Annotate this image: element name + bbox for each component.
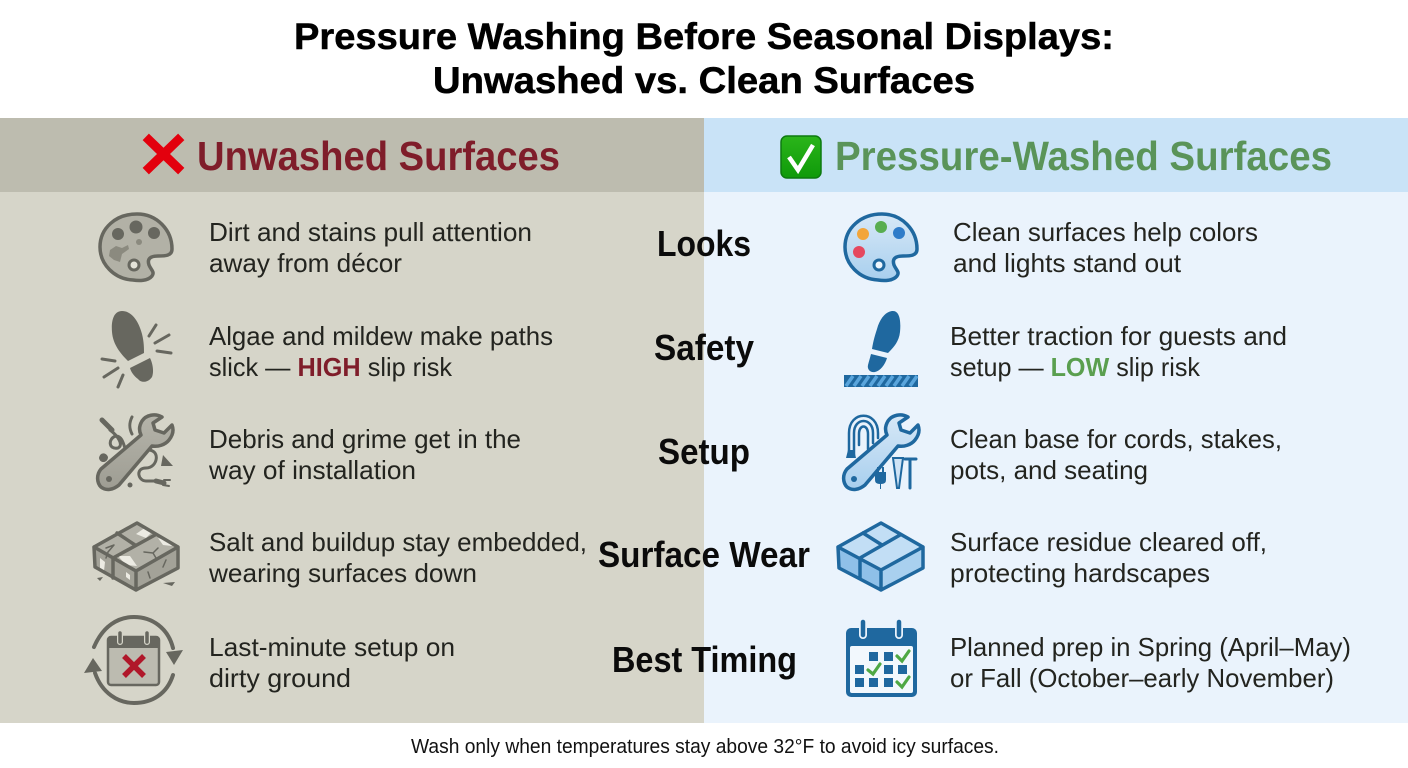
icon: cracked paver — [94, 523, 178, 590]
footer note: Wash only when temperatures stay above 32°F to avoid icy surfaces. — [411, 736, 999, 758]
icon: clean paver — [838, 523, 923, 590]
category labels: Safety — [654, 327, 754, 368]
text: looks, unwashed: away from décor — [209, 248, 402, 278]
panel: pressure-washed surfaces — [704, 118, 1408, 723]
category labels: Looks — [657, 223, 751, 264]
icon: calendar with green checks — [846, 622, 917, 697]
text: best timing, washed — [950, 632, 1351, 693]
text: safety, washed — [950, 321, 1287, 382]
text: surface wear, washed: protecting hardscapes — [950, 558, 1210, 588]
text: safety, unwashed: slick — HIGH slip risk — [209, 352, 453, 382]
text: surface wear, washed — [950, 527, 1267, 588]
icon: dirty palette — [100, 214, 172, 281]
text: setup, unwashed — [208, 424, 521, 485]
category labels — [598, 223, 810, 680]
text: looks, unwashed: Dirt and stains pull attention — [209, 217, 532, 247]
icon: calendar with red x and cycle arrows — [84, 617, 183, 703]
text: looks, washed — [953, 217, 1258, 278]
category labels: Best Timing — [612, 639, 797, 680]
icon: slipping shoe print — [102, 311, 171, 387]
text: safety, washed: Better traction for guests and — [950, 321, 1287, 351]
text: best timing, unwashed: Last-minute setup on — [209, 632, 455, 662]
heading: pressure-washed surfaces: Pressure-Washed Surfaces — [835, 133, 1332, 179]
text: surface wear, unwashed: Salt and buildup stay embedded, — [209, 527, 587, 557]
icon: colorful palette — [845, 214, 917, 281]
text: best timing, unwashed: dirty ground — [209, 663, 351, 693]
text: safety, unwashed — [209, 321, 553, 382]
text: looks, washed: Clean surfaces help colors — [953, 217, 1258, 247]
icon: wrench, cords and stakes — [844, 415, 919, 489]
text: setup, unwashed: way of installation — [208, 455, 416, 485]
text: best timing, washed: Planned prep in Spring (April–May) — [950, 632, 1351, 662]
text: setup, washed: pots, and seating — [950, 455, 1148, 485]
category labels: Surface Wear — [598, 534, 810, 575]
title: Unwashed vs. Clean Surfaces — [433, 60, 975, 101]
text: setup, unwashed: Debris and grime get in the — [209, 424, 521, 454]
text: setup, washed: Clean base for cords, stakes, — [950, 424, 1282, 454]
text: best timing, unwashed — [209, 632, 455, 693]
text: best timing, washed: or Fall (October–early November) — [950, 663, 1334, 693]
title: Pressure Washing Before Seasonal Displays: — [294, 16, 1114, 57]
category labels: Setup — [658, 431, 750, 472]
text: looks, unwashed — [209, 217, 532, 278]
text: surface wear, unwashed: wearing surfaces down — [208, 558, 477, 588]
text: setup, washed — [950, 424, 1282, 485]
text: surface wear, unwashed — [208, 527, 587, 588]
heading: unwashed surfaces: Unwashed Surfaces — [197, 133, 560, 179]
title — [294, 16, 1114, 101]
icon: shoe on textured ground — [844, 311, 918, 387]
text: safety, unwashed: Algae and mildew make paths — [209, 321, 553, 351]
icon: wrench with tangled cords — [98, 415, 173, 489]
text: surface wear, washed: Surface residue cleared off, — [950, 527, 1267, 557]
text: looks, washed: and lights stand out — [953, 248, 1182, 278]
panel: unwashed surfaces — [0, 118, 704, 723]
text: safety, washed: setup — LOW slip risk — [950, 352, 1201, 382]
